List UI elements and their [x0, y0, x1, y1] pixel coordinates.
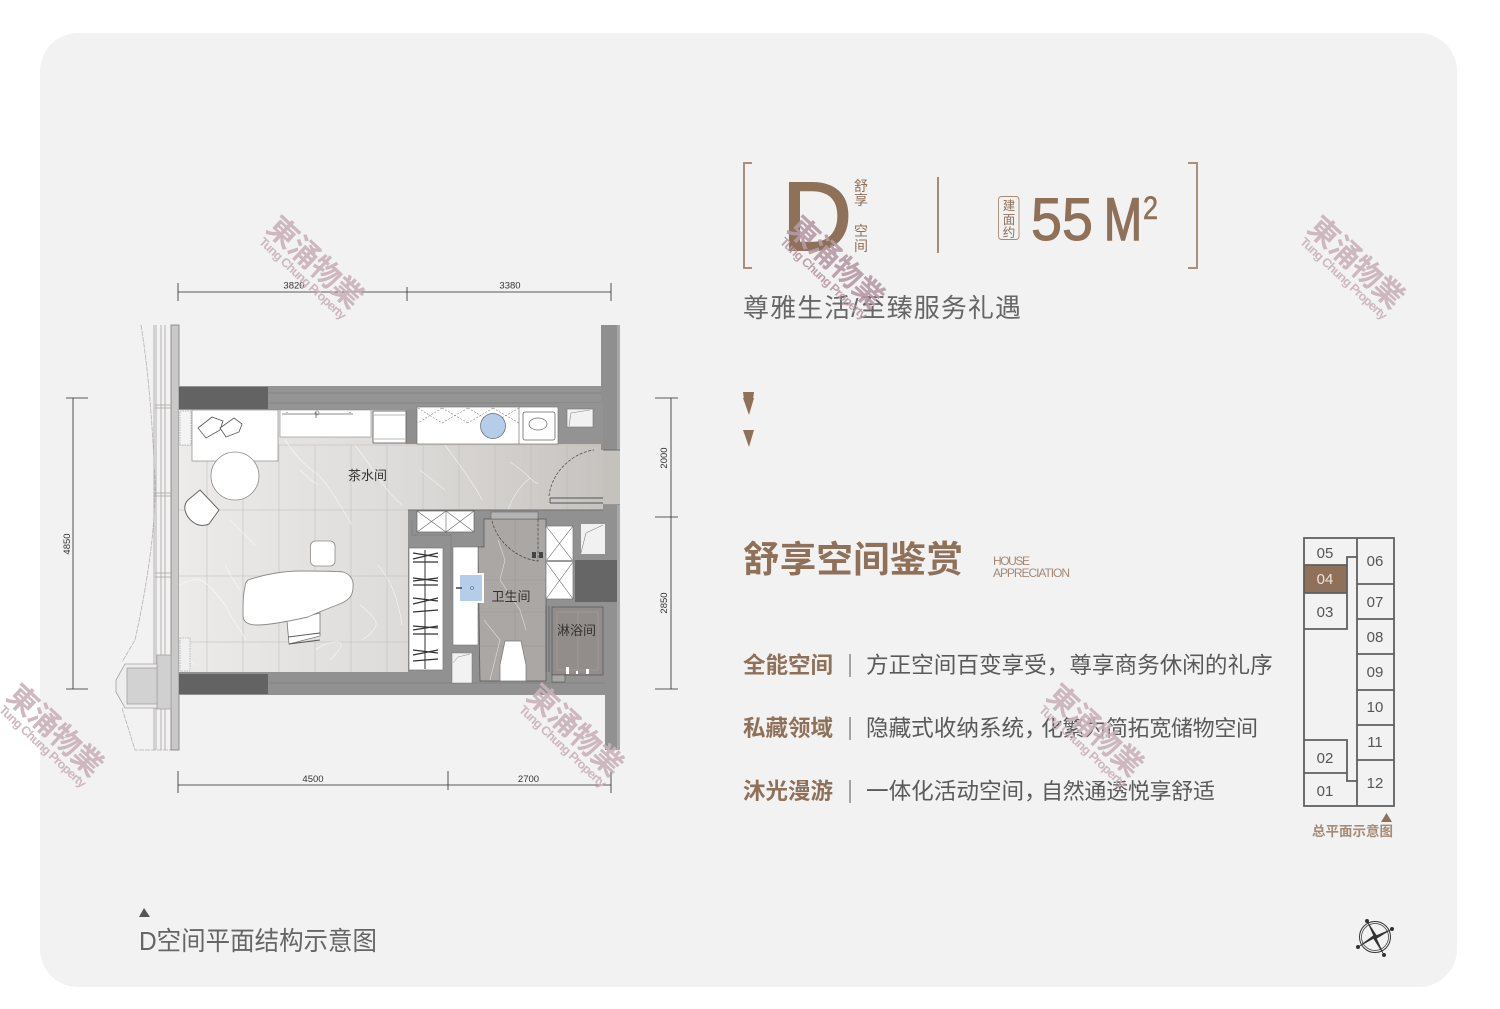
wardrobe with hangers [409, 548, 443, 670]
type name vertical: 空 [854, 223, 868, 239]
watermark 1: Tung Chung Property [256, 235, 349, 323]
feature 3: 自然通透悦享舒适 [1041, 779, 1215, 804]
dimension labels: 2850 [659, 592, 670, 614]
unit numbers: 03 [1317, 604, 1333, 621]
desk and sofa [180, 410, 278, 671]
dimension labels: 4500 [302, 774, 324, 785]
dimension labels: 2700 [518, 774, 539, 785]
bathroom floor [478, 512, 546, 681]
brackets [744, 163, 1197, 268]
room labels: 卫生间 [491, 589, 531, 604]
unit numbers: 11 [1367, 734, 1383, 751]
watermark 6: Tung Chung Property [1036, 703, 1129, 791]
vanity and sink [452, 547, 483, 683]
watermark 4: 東涌物業 [0, 679, 109, 783]
watermark 5: 東涌物業 [520, 679, 629, 783]
decorative triangles [743, 392, 754, 447]
lower core walls [179, 505, 620, 750]
feature 2 [743, 716, 1258, 741]
section heading english [993, 554, 1070, 580]
shower room [546, 606, 603, 682]
feature 2: 隐藏式收纳系统， [866, 716, 1047, 741]
dimension labels: 2000 [659, 447, 670, 469]
area tag [998, 196, 1019, 240]
room labels [348, 468, 596, 638]
feature 1: 方正空间百变享受，尊享商务休闲的礼序 [866, 653, 1273, 678]
feature 1: 全能空间 [743, 653, 833, 678]
entry door [549, 450, 620, 505]
unit numbers [1317, 545, 1383, 800]
feature list [743, 653, 1273, 804]
title block [744, 162, 1197, 271]
unit numbers: 07 [1367, 594, 1383, 611]
plan caption [139, 908, 377, 956]
watermark 1: 東涌物業 [260, 211, 369, 315]
dimension labels: 3380 [499, 280, 521, 292]
feature 3: 一体化活动空间， [866, 779, 1047, 804]
window wall and bay [116, 325, 179, 750]
room labels: 茶水间 [348, 468, 387, 483]
unit numbers: 02 [1317, 750, 1333, 767]
unit numbers: 09 [1367, 664, 1383, 681]
unit numbers: 04 [1317, 571, 1333, 588]
floor plan [116, 325, 620, 750]
area value: 55 [1031, 186, 1093, 253]
plan caption: D空间平面结构示意图 [139, 926, 377, 956]
type letter D: D [782, 162, 852, 271]
unit numbers: 12 [1367, 775, 1383, 792]
key plan caption [1312, 813, 1393, 839]
key plan [1304, 538, 1394, 839]
dimension labels [62, 280, 670, 785]
section heading: 舒享空间鉴赏 [743, 539, 963, 580]
watermark 6: 東涌物業 [1040, 679, 1149, 783]
area unit: 2 [1143, 190, 1158, 226]
dimension labels: 4850 [62, 533, 73, 555]
feature 2: 化繁为简拓宽储物空间 [1041, 716, 1258, 741]
upper wall [179, 325, 620, 450]
area tag: 约 [1003, 225, 1015, 240]
type name vertical: 享 [854, 192, 868, 208]
subtitle: 尊雅生活/至臻服务礼遇 [743, 293, 1021, 323]
unit numbers: 01 [1317, 783, 1333, 800]
type name vertical [854, 178, 868, 254]
feature 3: 沐光漫游 [743, 779, 833, 804]
feature 3 [743, 779, 1215, 804]
right closets and shaft [546, 524, 617, 602]
stool, table and chair [243, 541, 353, 644]
watermark 5: Tung Chung Property [516, 703, 609, 791]
toilet [500, 641, 526, 681]
type name vertical: 间 [854, 238, 868, 254]
highlighted unit 04 [1304, 565, 1347, 593]
unit outlines [1304, 538, 1394, 806]
watermark 3: 東涌物業 [1301, 211, 1410, 315]
area unit: M [1104, 186, 1142, 253]
type name vertical: 舒 [854, 178, 868, 194]
area tag: 面 [1003, 213, 1015, 227]
dimension lines [66, 283, 678, 793]
closet doors [417, 511, 474, 532]
unit numbers: 08 [1367, 629, 1383, 646]
feature 2: 私藏领域 [743, 716, 834, 741]
unit numbers: 10 [1367, 699, 1383, 716]
tea counter and cabinet [280, 410, 406, 443]
watermark 3: Tung Chung Property [1297, 235, 1390, 323]
section heading english: APPRECIATION [993, 566, 1070, 580]
floor grid and veins [179, 440, 610, 672]
marble floor main [179, 410, 610, 672]
room labels: 淋浴间 [557, 623, 596, 638]
unit numbers: 06 [1367, 553, 1383, 570]
key plan caption: 总平面示意图 [1312, 823, 1393, 839]
icon: compass [1356, 920, 1394, 956]
dimension labels: 3820 [283, 280, 305, 292]
kitchen counter with basin [417, 407, 558, 444]
area tag: 建 [1003, 199, 1016, 213]
unit numbers: 05 [1317, 545, 1333, 562]
watermark 2: Tung Chung Property [777, 235, 870, 323]
watermark 2: 東涌物業 [781, 211, 890, 315]
section heading english: HOUSE [993, 554, 1030, 568]
